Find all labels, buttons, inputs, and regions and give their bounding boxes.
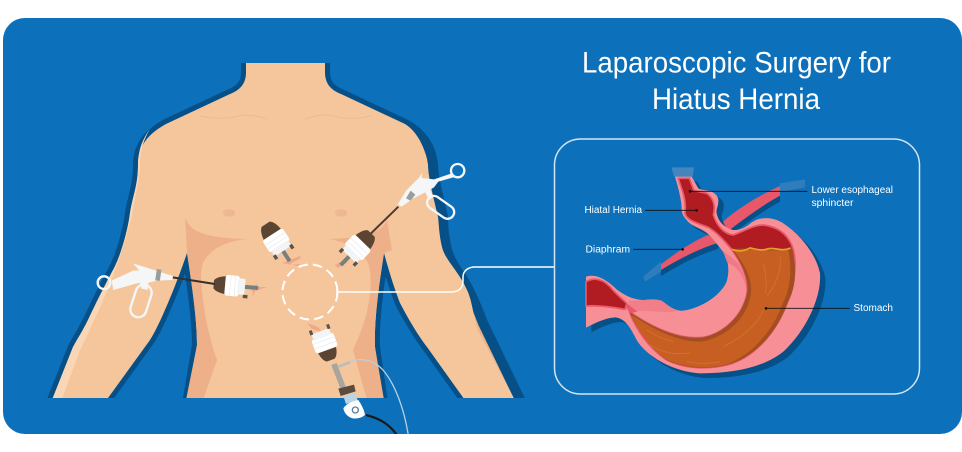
stomach shadow xyxy=(591,181,825,378)
arm highlight xyxy=(48,129,150,410)
diaphragm xyxy=(643,167,805,282)
torso illustration xyxy=(48,55,525,410)
laparoscope cables xyxy=(350,360,409,440)
lesser curve fold xyxy=(628,299,678,312)
trocar upper right xyxy=(332,225,380,273)
grasper shaft right xyxy=(368,207,398,236)
title: Hiatus Hernia xyxy=(652,83,821,116)
inner fold near antrum xyxy=(723,251,747,293)
title xyxy=(582,46,891,116)
torso shading right xyxy=(328,220,392,400)
label: lower esophageal sphincter: Lower esophageal xyxy=(812,185,893,196)
trocar upper center xyxy=(256,218,300,268)
connector line to detail panel xyxy=(337,267,555,297)
trocar left xyxy=(213,274,259,299)
leader lines xyxy=(633,190,850,309)
incision marks xyxy=(250,256,348,332)
duodenum lumen xyxy=(586,279,627,309)
gastric fluid xyxy=(629,247,795,368)
pylorus xyxy=(626,303,637,313)
nipples xyxy=(223,209,347,217)
label: hiatal hernia: Hiatal Hernia xyxy=(584,205,642,216)
surgical instruments xyxy=(98,164,464,419)
label: lower esophageal sphincter xyxy=(812,185,893,209)
panel border xyxy=(554,139,920,394)
torso shading left xyxy=(185,217,247,400)
stomach illustration xyxy=(586,167,850,378)
laparoscope xyxy=(334,362,365,419)
grasper right xyxy=(398,164,464,221)
inner lining and lumen xyxy=(629,178,795,368)
dashed focus circle xyxy=(282,264,338,320)
label: diaphram: Diaphram xyxy=(586,244,630,256)
skin main xyxy=(48,55,520,410)
collar bones xyxy=(200,115,371,119)
stomach outer wall xyxy=(586,177,820,373)
fluid surface xyxy=(732,248,791,251)
grasper left xyxy=(98,263,215,319)
label: lower esophageal sphincter: sphincter xyxy=(812,198,854,209)
trocar bottom xyxy=(308,324,342,364)
panel: stomach detail xyxy=(554,139,920,394)
title: Laparoscopic Surgery for xyxy=(582,46,891,80)
label: stomach: Stomach xyxy=(854,303,893,314)
fluid wrinkles xyxy=(647,257,780,363)
